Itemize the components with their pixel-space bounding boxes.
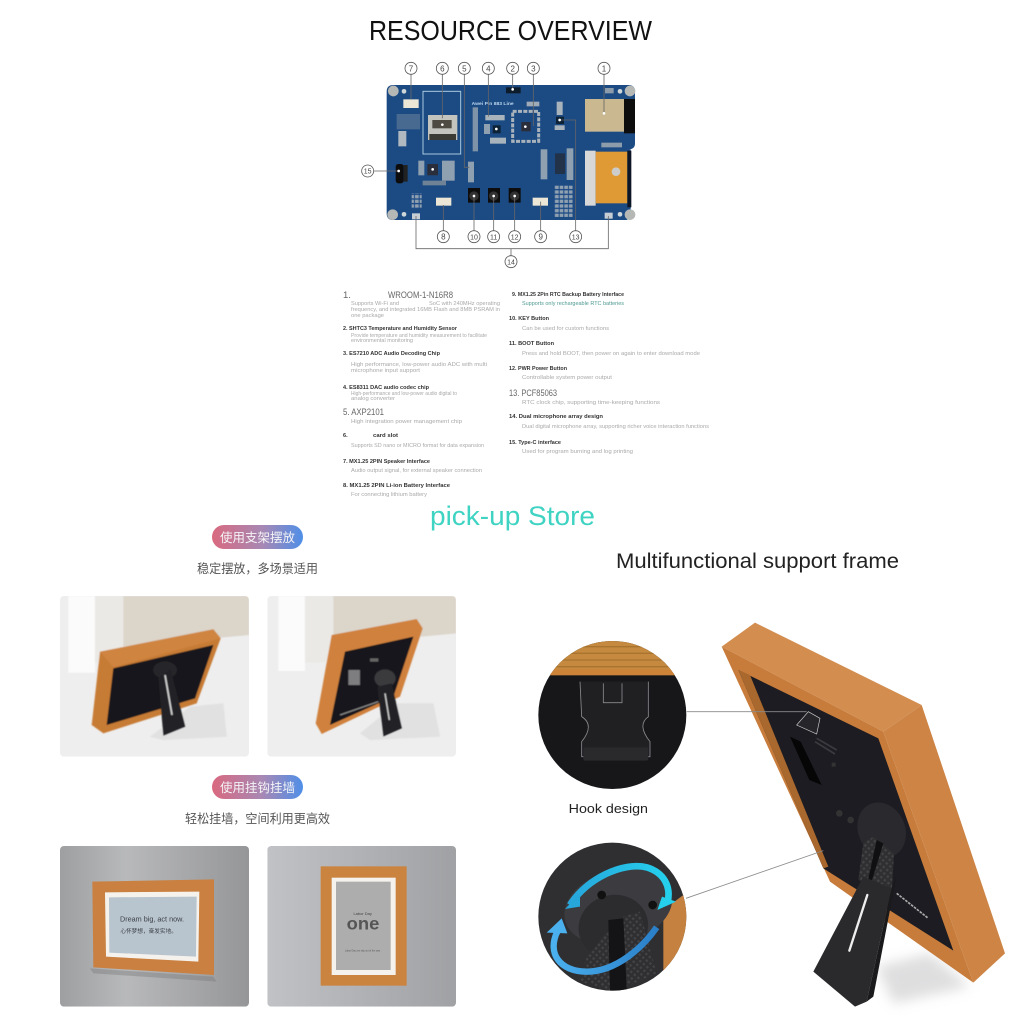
detail circle: rotating hinge [537, 842, 690, 992]
photo: wall mounted portrait: one [347, 913, 379, 933]
resource list: left column: frequency, and integrated 16MB Flash and 8MB PSRAM in [351, 307, 500, 313]
resource list: left column: Supports Wi-Fi and [351, 301, 399, 307]
resource list: right column: Controllable system power output [522, 375, 613, 381]
resource list: left column: analog converter [351, 396, 395, 402]
resource list: right column: 15. Type-C interface [509, 440, 561, 446]
numbered markers: 1 [602, 64, 607, 73]
multifunctional heading: Multifunctional support frame [616, 549, 899, 573]
title: RESOURCE OVERVIEW [369, 15, 653, 46]
wooden frame [722, 623, 1005, 983]
resource list: left column: 8. MX1.25 2PIN Li-ion Battery Interface [343, 483, 450, 489]
resource list: right column: 11. BOOT Button [509, 341, 555, 347]
board diagram [362, 62, 635, 268]
numbered markers: 10 [470, 234, 478, 241]
numbered markers: 11 [490, 234, 497, 241]
resource list: right column: 10. KEY Button [509, 316, 550, 322]
numbered markers [362, 62, 610, 268]
resource list: left column: 7. MX1.25 2PIN Speaker Interface [343, 459, 430, 465]
numbered markers: 12 [511, 234, 519, 241]
photos: stand placement [60, 596, 456, 757]
resource list: right column: 14. Dual microphone array design [509, 414, 604, 420]
numbered markers: 2 [510, 64, 515, 73]
rotating stand [813, 794, 915, 1007]
resource list: left column: SoC with 240MHz operating [429, 301, 500, 307]
resource list: left column: WROOM-1-N16R8 [388, 290, 453, 301]
numbered markers: 3 [531, 64, 536, 73]
resource list: left column: one package [351, 313, 384, 319]
resource list: right column: Supports only rechargeable RTC batteries [522, 301, 624, 307]
numbered markers: 14 [507, 259, 515, 266]
photo: wall mounted landscape: Dream big, act now. [120, 916, 184, 924]
resource list: left column: environmental monitoring [351, 338, 413, 344]
pcb board [387, 85, 635, 220]
resource list: left column: Supports SD nano or MICRO format for data expansion [351, 443, 484, 449]
resource list: right column: 9. MX1.25 2Pin RTC Backup Battery Interface [512, 292, 624, 298]
resource list: left column: Provide temperature and humidity measurement to facilitate [351, 333, 487, 339]
photo: frame on stand, landscape [60, 596, 249, 757]
resource list: right column: RTC clock chip, supporting time-keeping functions [522, 400, 660, 406]
resource list: left column [343, 290, 500, 498]
pill: stand placement [212, 525, 303, 549]
product illustration: back of frame with stand [537, 623, 1005, 1007]
callout lines [374, 74, 608, 256]
photo: wall mounted landscape [60, 846, 249, 1007]
hook and ports [790, 712, 928, 918]
resource list: left column: microphone input support [351, 368, 421, 374]
numbered markers: 9 [538, 233, 543, 242]
photo: wall mounted portrait: Labor Day one day out of the year [345, 950, 380, 953]
pill: stand placement: 使用支架摆放 [220, 530, 295, 545]
resource list: left column: High performance, low-power audio ADC with multi [351, 362, 487, 368]
hook design label: Hook design [569, 802, 648, 816]
resource list: left column: High integration power management chip [351, 419, 462, 425]
resource list: left column: For connecting lithium battery [351, 492, 427, 498]
resource list: left column: 4. ES8311 DAC audio codec chip [343, 385, 430, 391]
resource list: right column: Can be used for custom functions [522, 326, 609, 332]
photo: wall mounted portrait: Labor Day [353, 911, 372, 916]
resource list: left column: 2. SHTC3 Temperature and Humidity Sensor [343, 326, 458, 332]
pill: hook mounting [212, 775, 303, 799]
resource list: right column: Press and hold BOOT, then power on again to enter download mode [522, 351, 700, 357]
resource list: left column: 3. ES7210 ADC Audio Decoding Chip [343, 351, 441, 357]
numbered markers: 6 [440, 64, 445, 73]
resource list: right column: 12. PWR Power Button [509, 366, 568, 372]
blue rotation arrows [547, 866, 676, 972]
resource list: left column: Audio output signal, for external speaker connection [351, 468, 482, 474]
resource list: left column: 1. [343, 290, 351, 301]
caption: hook mounting: 轻松挂墙，空间利用更高效 [185, 811, 330, 826]
numbered markers: 5 [462, 64, 467, 73]
resource list: left column: card slot [373, 433, 398, 439]
resource list: left column: 5. AXP2101 [343, 407, 384, 418]
photos: wall mounted [60, 846, 456, 1007]
resource list: left column: High-performance and low-power audio digital to [351, 391, 457, 397]
pick-up store heading: pick-up Store [430, 501, 595, 531]
resource list: left column: 6. [343, 433, 348, 439]
resource list: right column: Used for program burning and log printing [522, 449, 633, 455]
numbered markers: 7 [409, 64, 414, 73]
resource list: right column: Dual digital microphone array, supporting richer voice interaction functions [522, 424, 709, 430]
resource list: right column: 13. PCF85063 [509, 388, 557, 399]
numbered markers: 4 [486, 64, 491, 73]
pcb board: Awei Pin 883 Line [472, 101, 514, 107]
pill: hook mounting: 使用挂钩挂墙 [220, 780, 295, 795]
frame shadow [877, 953, 970, 1003]
photo: wall mounted landscape: 心怀梦想，奋发实地。 [120, 927, 177, 935]
numbered markers: 8 [441, 233, 446, 242]
resource list: right column [509, 292, 709, 455]
numbered markers: 13 [572, 234, 580, 241]
pointer lines [686, 712, 823, 898]
caption: stand placement: 稳定摆放，多场景适用 [197, 561, 318, 576]
photo: frame on stand, portrait [267, 596, 456, 757]
photo: wall mounted portrait [267, 846, 456, 1007]
numbered markers: 15 [364, 169, 372, 176]
detail circle: hook [537, 640, 690, 790]
